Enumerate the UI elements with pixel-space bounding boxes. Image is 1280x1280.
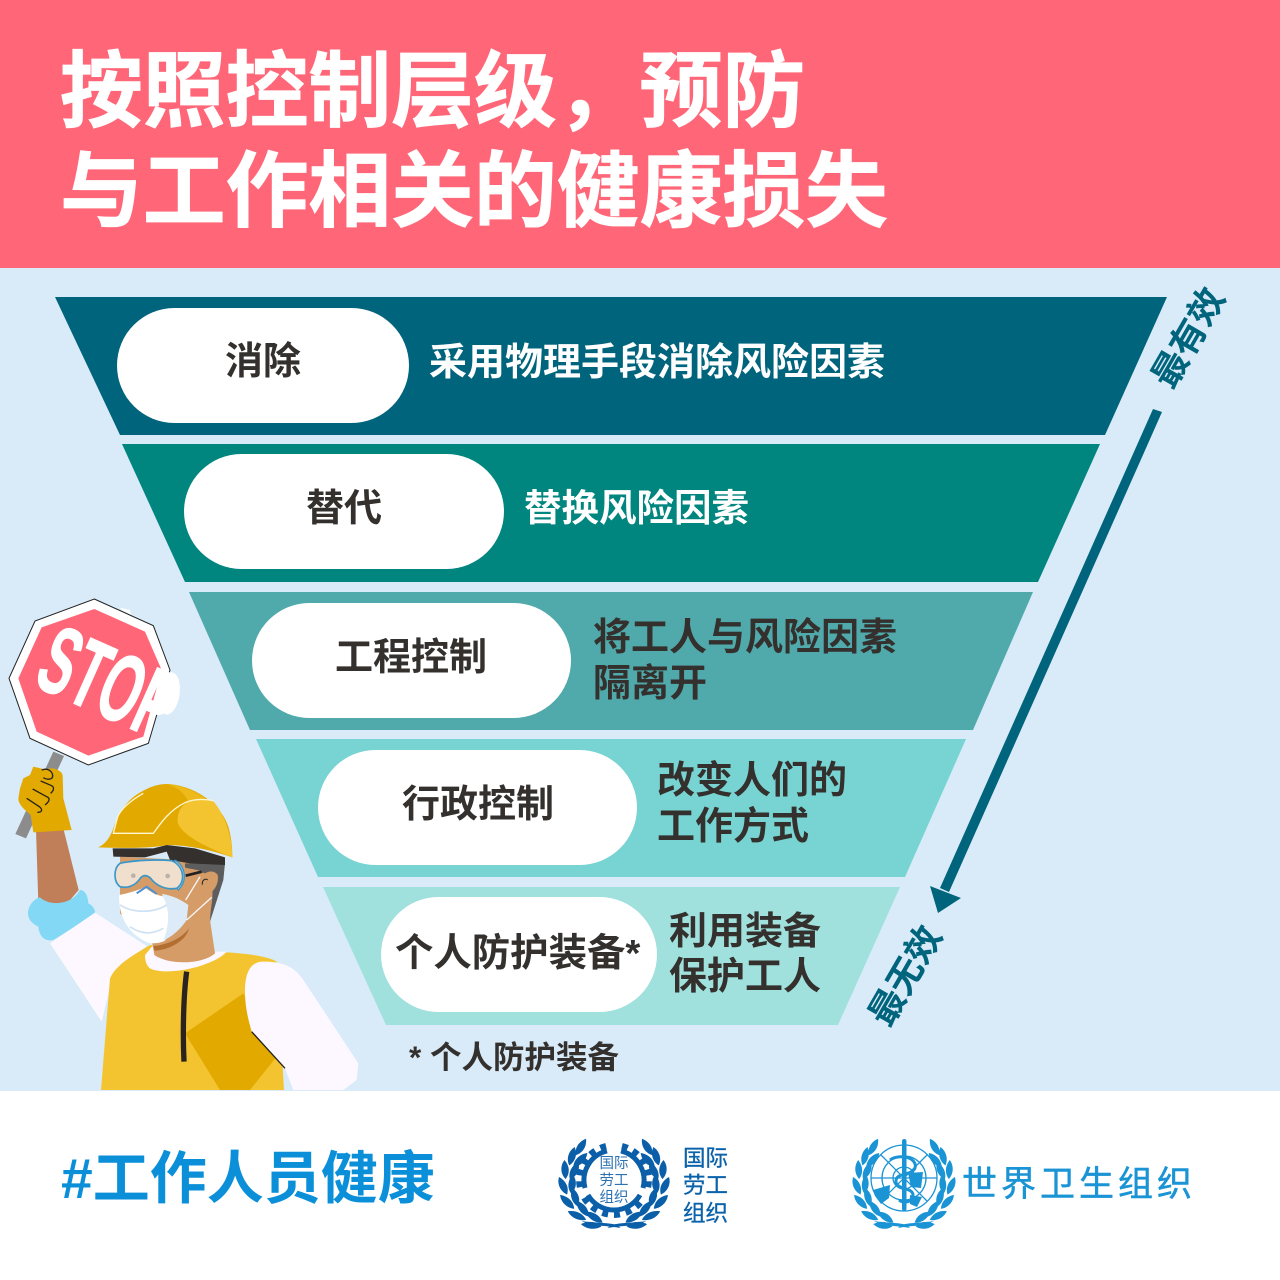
funnel: hierarchy of controls <box>55 297 1167 1025</box>
arrow: most to least effective <box>930 409 1162 913</box>
level 5: PPE: 个人防护装备* <box>395 932 640 975</box>
level 4: administrative controls: 行政控制 <box>402 784 554 826</box>
glove <box>18 767 72 832</box>
goggle strap <box>186 872 202 876</box>
level 4: administrative controls: 工作方式 <box>657 806 809 848</box>
level 4: administrative controls <box>256 739 966 877</box>
right sleeve <box>245 962 358 1090</box>
head <box>98 784 232 962</box>
face and neck <box>120 857 215 962</box>
WHO name: 世界卫生组织 <box>962 1165 1196 1204</box>
ILO name: 组织 <box>683 1201 728 1226</box>
header banner <box>0 0 1280 268</box>
level 1: elimination <box>55 297 1167 435</box>
glove cuff <box>28 890 95 940</box>
footnote: * 个人防护装备 <box>409 1039 620 1075</box>
front hair <box>113 845 225 865</box>
raised arm <box>36 828 79 906</box>
level 1: elimination: 消除 <box>225 341 301 383</box>
back hair <box>185 863 225 922</box>
level 2: substitution <box>122 444 1100 582</box>
hashtag: #工作人员健康 <box>61 1147 435 1211</box>
level 1: elimination: 采用物理手段消除风险因素 <box>429 342 885 384</box>
level 2: substitution: 替代 <box>306 488 382 530</box>
label: least effective: 最无效 <box>860 919 950 1033</box>
ILO gear <box>579 1146 649 1215</box>
hard hat <box>98 784 232 857</box>
level 3: engineering controls: 将工人与风险因素 <box>593 617 897 659</box>
respirator mask <box>119 877 212 943</box>
ILO name: 国际 <box>683 1146 728 1171</box>
left sleeve <box>50 913 147 1022</box>
zipper <box>183 972 187 1062</box>
WHO staff and serpent <box>890 1139 915 1211</box>
WHO wreath <box>849 1137 959 1229</box>
footer band <box>0 1091 1280 1280</box>
level 4: administrative controls: 改变人们的 <box>657 760 847 802</box>
ILO name: 劳工 <box>683 1173 728 1198</box>
sign stick <box>15 752 64 838</box>
ear <box>200 872 218 897</box>
stop sign: STOP <box>23 606 193 760</box>
WHO continents <box>873 1172 923 1207</box>
ILO inner text: 国际 <box>600 1156 628 1172</box>
ILO wreath <box>555 1137 673 1229</box>
collar <box>145 945 227 971</box>
level 3: engineering controls: 隔离开 <box>593 663 707 705</box>
ILO logo <box>555 1137 673 1229</box>
level 3: engineering controls: 工程控制 <box>335 637 487 679</box>
level 3: engineering controls <box>189 592 1033 730</box>
ILO inner text: 组织 <box>600 1189 628 1206</box>
goggles <box>115 860 184 890</box>
level 5: PPE: 保护工人 <box>669 956 821 998</box>
level 2: substitution: 替换风险因素 <box>524 487 749 529</box>
WHO logo <box>849 1137 959 1229</box>
worker illustration holding stop sign <box>9 599 358 1090</box>
vest <box>101 945 284 1090</box>
title: 与工作相关的健康损失 <box>60 145 888 238</box>
jaw shadow <box>153 928 189 951</box>
WHO globe <box>871 1145 937 1211</box>
level 5: PPE: 利用装备 <box>669 911 821 953</box>
label: most effective: 最有效 <box>1143 281 1233 395</box>
level 5: PPE <box>323 887 900 1025</box>
ILO inner text: 劳工 <box>600 1172 628 1189</box>
title: 按照控制层级，预防 <box>60 45 805 138</box>
